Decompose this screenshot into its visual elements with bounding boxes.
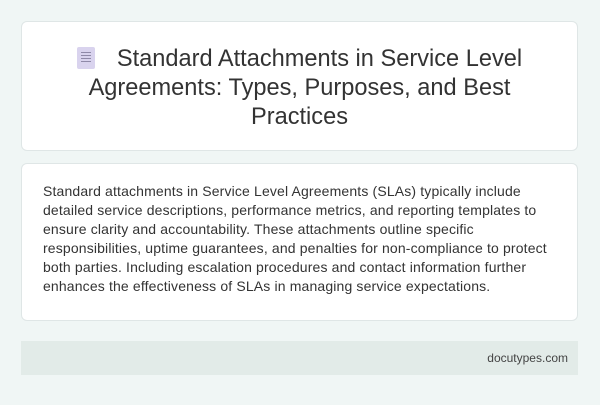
footer bar	[21, 341, 578, 375]
footer text: docutypes.com	[487, 351, 568, 365]
panel: description card	[21, 163, 578, 321]
panel: title card	[21, 21, 578, 151]
icon: document scroll	[77, 47, 95, 69]
title: Standard Attachments in Service Level Agreements: Types, Purposes, and Best Practices	[89, 46, 522, 130]
text block: description: Standard attachments in Service Level Agreements (SLAs) typically include detailed service descriptions, performance metrics, and reporting templates to ensure clarity and accountability. These attachments outline specific responsibilities, uptime guarantees, and penalties for non-compliance to protect both parties. Including escalation procedures and contact information further enhances the effectiveness of SLAs in managing service expectations.	[43, 183, 547, 294]
